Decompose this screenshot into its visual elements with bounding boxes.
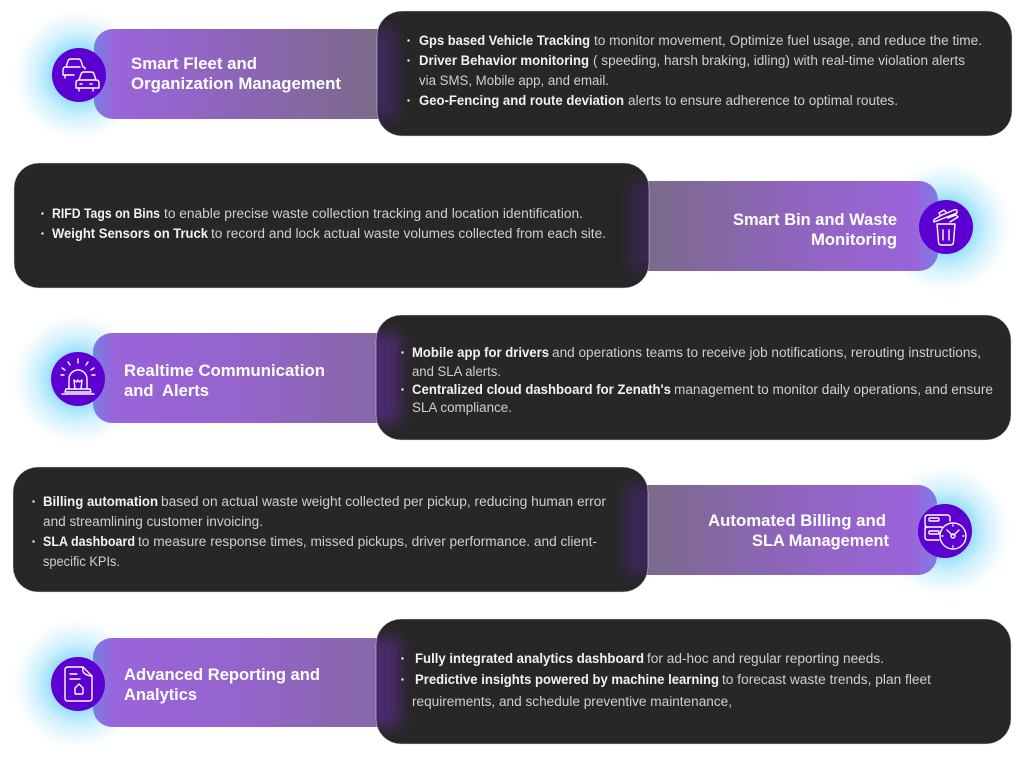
- icon glow: advanced reporting: [8, 614, 148, 754]
- text panel: advanced reporting details: [340, 619, 1011, 744]
- icon glow: realtime communication: [8, 309, 148, 449]
- text panel: smart fleet details: [340, 11, 1012, 136]
- text panel: smart fleet details: alerts to ensure adherence to optimal routes.: [628, 93, 898, 108]
- text panel: advanced reporting details: for ad-hoc and regular reporting needs.: [647, 651, 884, 666]
- text panel: automated billing details: Billing automation: [43, 494, 158, 509]
- heading pill: smart bin: Monitoring: [811, 230, 897, 249]
- text panel: realtime communication details: and operations teams to receive job notifications, rerouting instructions,: [552, 345, 981, 360]
- text panel: realtime communication details: management to monitor daily operations, and ensure: [674, 382, 993, 397]
- text panel: realtime communication details: and SLA alerts.: [412, 364, 501, 379]
- text panel: smart bin details: RIFD Tags on Bins: [52, 206, 160, 221]
- text panel: advanced reporting details: Predictive insights powered by machine learning: [415, 672, 719, 687]
- text panel: smart bin details: to enable precise waste collection tracking and location identification.: [164, 206, 583, 221]
- icon glow: automated billing: [875, 461, 1015, 601]
- text panel: automated billing details: based on actual waste weight collected per pickup, reducing human error: [161, 494, 607, 509]
- text panel: automated billing details: and streamlining customer invoicing.: [43, 514, 263, 529]
- icon: siren alert: [51, 352, 105, 406]
- text panel: smart bin details: Weight Sensors on Truck: [52, 226, 208, 241]
- heading pill: realtime communication: [93, 333, 377, 423]
- text panel: automated billing details: SLA dashboard: [43, 534, 135, 549]
- heading pill: smart fleet: Organization Management: [131, 74, 341, 93]
- text panel: smart fleet details: via SMS, Mobile app, and email.: [419, 73, 609, 88]
- text panel: advanced reporting details: Fully integrated analytics dashboard: [415, 651, 644, 666]
- icon glow: smart bin: [876, 157, 1016, 297]
- icon: report document: [51, 657, 105, 711]
- heading pill: automated billing: Automated Billing and: [708, 511, 886, 530]
- text panel: automated billing details: specific KPIs.: [43, 554, 120, 569]
- heading pill: realtime communication: Realtime Communication: [124, 361, 325, 380]
- icon: waste bin: [919, 200, 973, 254]
- heading pill: smart bin: [648, 181, 938, 271]
- text panel: smart fleet details: Geo-Fencing and route deviation: [419, 93, 624, 108]
- heading pill: smart fleet: [94, 29, 378, 119]
- text panel: automated billing details: [13, 467, 680, 592]
- panel: smart fleet row: [20, 10, 1012, 136]
- panel: automated billing row: [12, 466, 1004, 592]
- text panel: smart bin details: [14, 163, 680, 288]
- heading pill: smart fleet: Smart Fleet and: [131, 54, 257, 73]
- heading pill: automated billing: SLA Management: [752, 531, 889, 550]
- heading pill: advanced reporting: [93, 638, 377, 727]
- text panel: smart fleet details: to monitor movement, Optimize fuel usage, and reduce the time.: [594, 33, 982, 48]
- icon: two cars: [52, 48, 106, 102]
- text panel: realtime communication details: Mobile app for drivers: [412, 345, 549, 360]
- text panel: smart bin details: to record and lock actual waste volumes collected from each site.: [211, 226, 606, 241]
- heading pill: smart bin: Smart Bin and Waste: [733, 210, 897, 229]
- panel: advanced reporting row: [18, 618, 1012, 744]
- text panel: realtime communication details: Centralized cloud dashboard for Zenath's: [412, 382, 671, 397]
- text panel: smart fleet details: Driver Behavior monitoring: [419, 53, 589, 68]
- panel: smart bin row: [14, 162, 1006, 288]
- icon: server and clock: [918, 504, 972, 558]
- icon glow: smart fleet: [9, 5, 149, 145]
- panel: realtime communication row: [18, 314, 1012, 440]
- heading pill: advanced reporting: Advanced Reporting and: [124, 665, 320, 684]
- text panel: automated billing details: to measure response times, missed pickups, driver performance. and client-: [138, 534, 597, 549]
- text panel: smart fleet details: ( speeding, harsh braking, idling) with real-time violation alerts: [593, 53, 965, 68]
- heading pill: realtime communication: and Alerts: [124, 381, 209, 400]
- text panel: realtime communication details: SLA compliance.: [412, 400, 512, 415]
- text panel: smart fleet details: Gps based Vehicle Tracking: [419, 33, 590, 48]
- heading pill: advanced reporting: Analytics: [124, 685, 197, 704]
- text panel: advanced reporting details: requirements, and schedule preventive maintenance,: [412, 694, 732, 709]
- heading pill: automated billing: [647, 485, 937, 575]
- text panel: realtime communication details: [340, 315, 1011, 440]
- text panel: advanced reporting details: to forecast waste trends, plan fleet: [722, 672, 931, 687]
